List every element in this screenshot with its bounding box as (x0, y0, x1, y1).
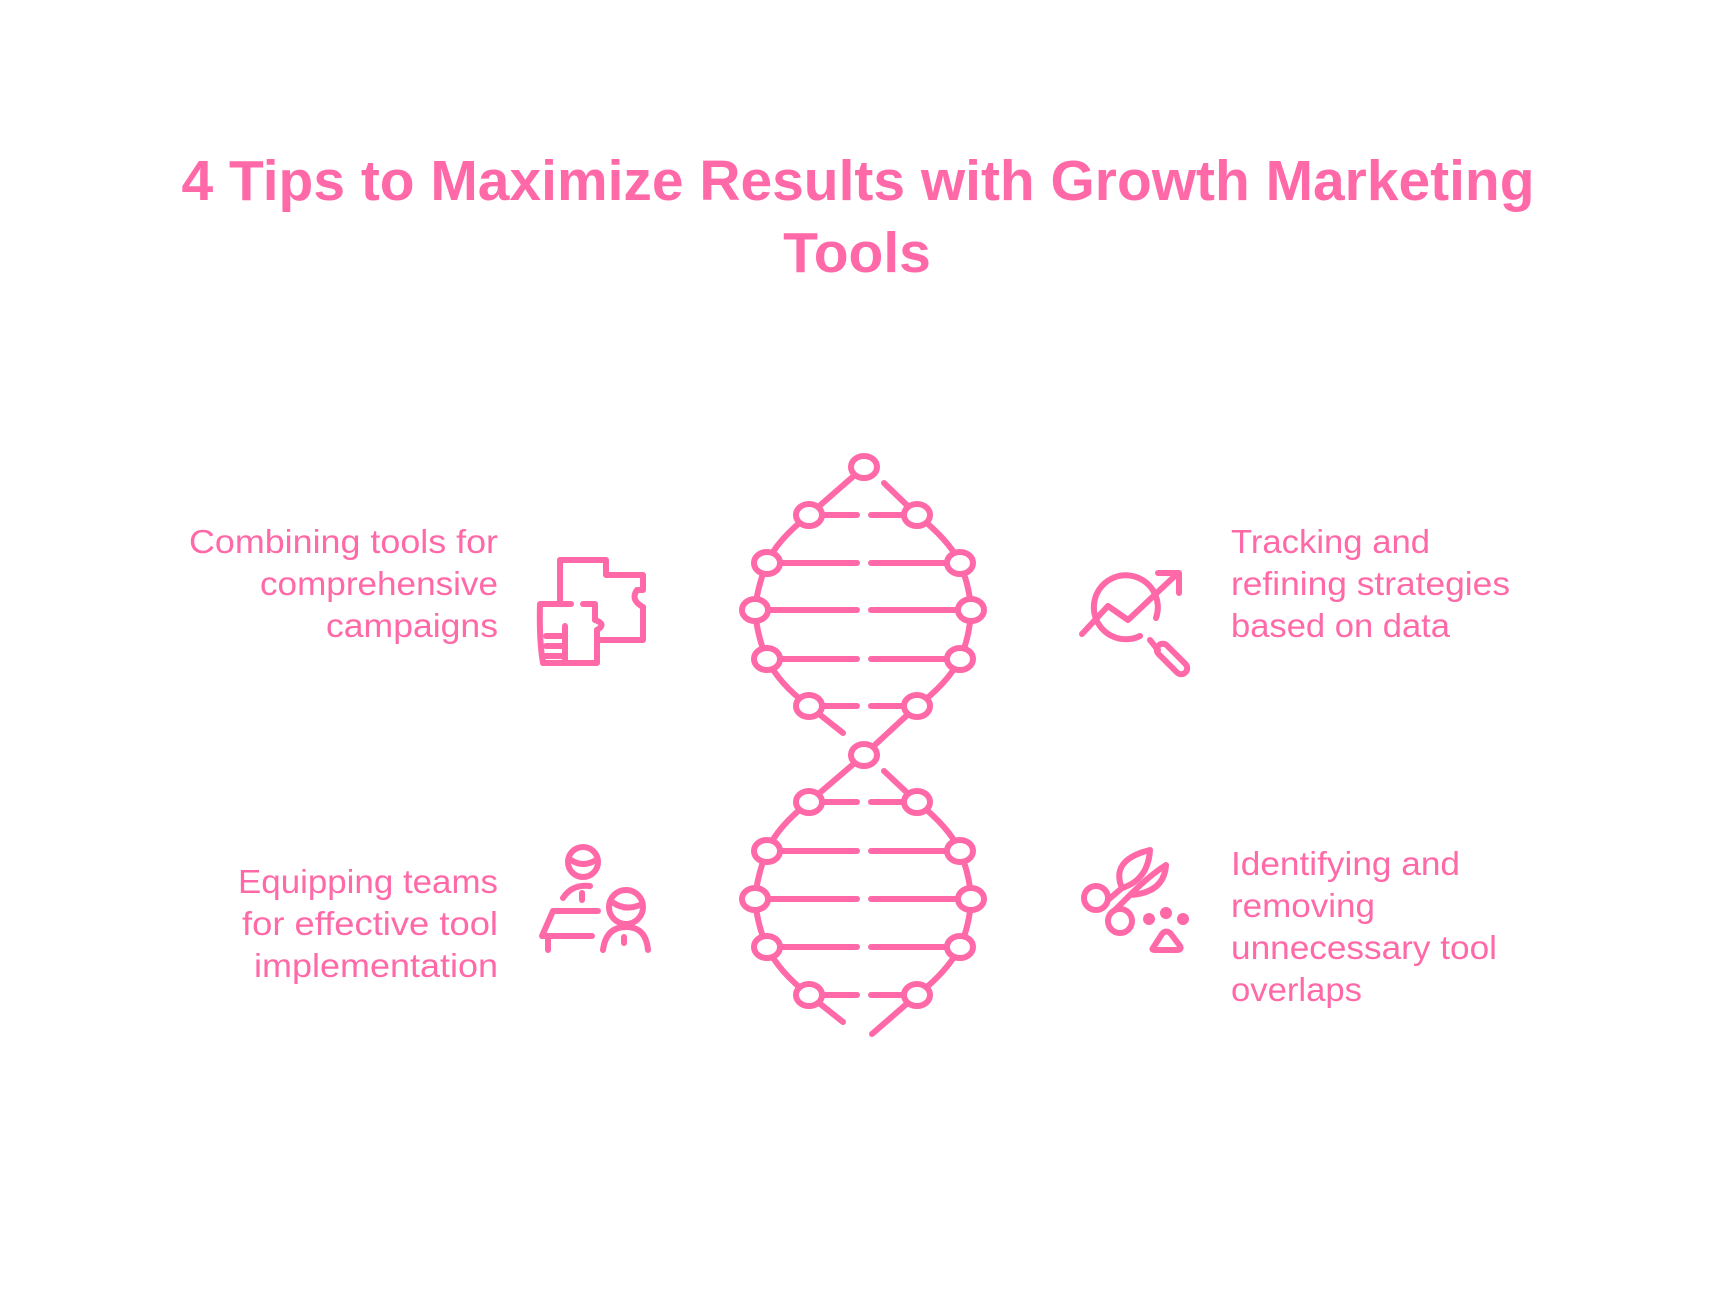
icon: puzzle (540, 560, 643, 663)
text: tracking: refining strategies (1231, 565, 1510, 602)
text: equipping teams: implementation (254, 947, 498, 984)
icon: scissors (1084, 850, 1186, 950)
text: identifying: Identifying and (1231, 845, 1460, 882)
DNA helix (742, 456, 984, 1034)
text: combining tools: Combining tools for (189, 523, 498, 560)
text: identifying: overlaps (1231, 971, 1362, 1008)
icon: team (542, 847, 648, 950)
text: identifying: unnecessary tool (1231, 929, 1497, 966)
text: combining tools (189, 523, 498, 644)
text: equipping teams (238, 863, 498, 984)
text: tracking: Tracking and (1231, 523, 1430, 560)
text: equipping teams: for effective tool (242, 905, 498, 942)
icon: chart magnifier (1082, 573, 1190, 677)
text: tracking (1231, 523, 1510, 644)
text: tracking: based on data (1231, 607, 1451, 644)
text: identifying (1231, 845, 1497, 1008)
text: equipping teams: Equipping teams (238, 863, 498, 900)
text: identifying: removing (1231, 887, 1375, 924)
text: combining tools: comprehensive (260, 565, 498, 602)
title: 4 Tips to Maximize Results with Growth Marketing (182, 149, 1534, 213)
title: Tools (783, 221, 931, 285)
text: combining tools: campaigns (326, 607, 498, 644)
title (182, 149, 1534, 285)
